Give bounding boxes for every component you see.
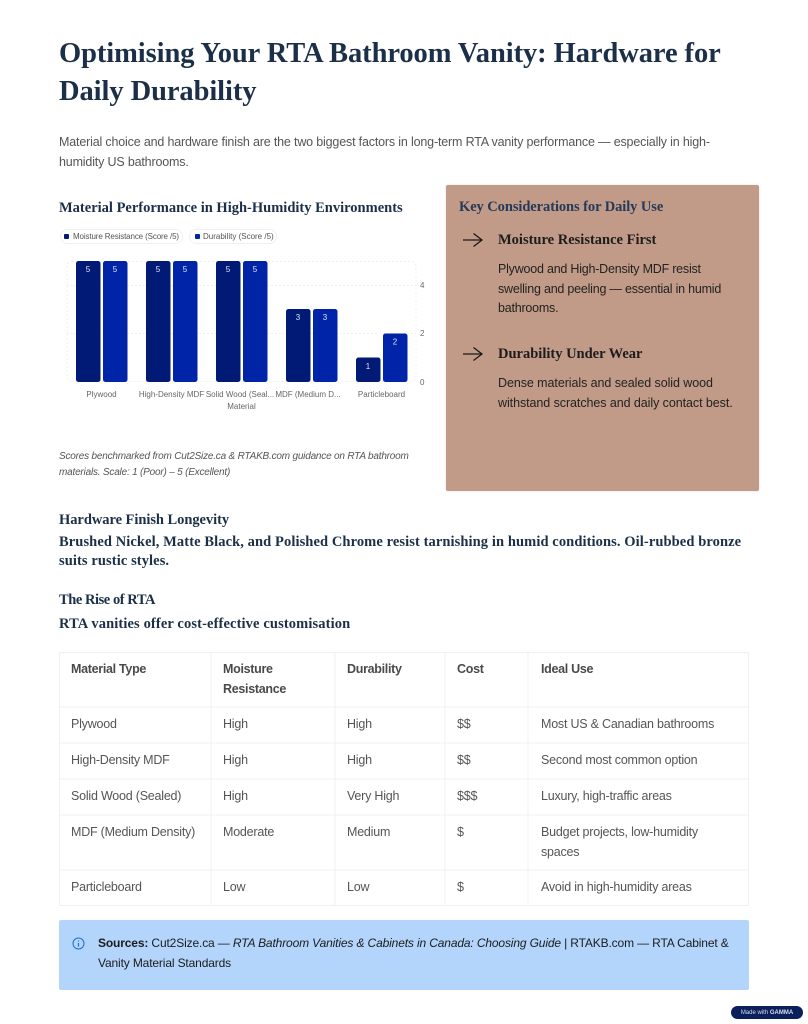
row: solid wood: Very High bbox=[347, 789, 399, 803]
panel heading: Key Considerations for Daily Use bbox=[459, 199, 663, 215]
bar value labels bbox=[86, 265, 398, 371]
callout: sources bbox=[59, 920, 749, 990]
x axis labels: MDF (Medium D... bbox=[275, 390, 341, 399]
row: high-density MDF: High bbox=[347, 753, 372, 767]
bar value labels: 3 bbox=[296, 313, 301, 322]
item text: Dense materials and sealed solid wood bbox=[498, 376, 713, 390]
row: MDF medium density: MDF (Medium Density) bbox=[71, 825, 195, 839]
intro text: Material choice and hardware finish are the two biggest factors in long-term RTA vanity performance — especially in high- bbox=[59, 135, 710, 149]
row: high-density MDF: High-Density MDF bbox=[71, 753, 170, 767]
heading: rise of RTA: The Rise of RTA bbox=[59, 592, 155, 608]
row: solid wood: High bbox=[223, 789, 248, 803]
row: high-density MDF: Second most common option bbox=[541, 753, 697, 767]
row: particleboard: Low bbox=[347, 880, 369, 894]
panel: key considerations bbox=[446, 185, 759, 491]
row: MDF medium density: Budget projects, low-humidity bbox=[541, 825, 698, 839]
item heading: Durability Under Wear bbox=[498, 346, 642, 362]
hardware finish text: suits rustic styles. bbox=[59, 553, 169, 569]
heading: hardware finish: Hardware Finish Longevity bbox=[59, 512, 229, 528]
title: Optimising Your RTA Bathroom Vanity: Hardware for bbox=[59, 38, 721, 69]
row: particleboard: Particleboard bbox=[71, 880, 142, 894]
y axis labels: 0 bbox=[420, 378, 425, 387]
x axis labels: Particleboard bbox=[358, 390, 405, 399]
row: particleboard: Avoid in high-humidity areas bbox=[541, 880, 692, 894]
row: particleboard bbox=[71, 880, 692, 894]
row: particleboard: $ bbox=[457, 880, 464, 894]
item text: withstand scratches and daily contact best. bbox=[498, 396, 733, 410]
row: solid wood: Solid Wood (Sealed) bbox=[71, 789, 181, 803]
item text bbox=[498, 376, 733, 410]
bar value labels: 3 bbox=[323, 313, 328, 322]
row: solid wood bbox=[71, 789, 672, 803]
title bbox=[59, 38, 721, 107]
item text: swelling and peeling — essential in humid bbox=[498, 282, 721, 296]
item text: Plywood and High-Density MDF resist bbox=[498, 262, 701, 276]
badge: made with gamma bbox=[731, 1006, 803, 1019]
legend: durability: Durability (Score /5) bbox=[203, 232, 274, 241]
row: plywood bbox=[71, 717, 714, 731]
icon: arrow bbox=[463, 347, 483, 361]
icon: arrow bbox=[463, 233, 483, 247]
header row bbox=[71, 662, 593, 696]
chart footnote bbox=[59, 451, 409, 478]
row: high-density MDF bbox=[71, 753, 697, 767]
header row: Moisture bbox=[223, 662, 273, 676]
chart footnote: Scores benchmarked from Cut2Size.ca & RTAKB.com guidance on RTA bathroom bbox=[59, 451, 409, 462]
chart heading: Material Performance in High-Humidity Environments bbox=[59, 200, 403, 216]
row: plywood: High bbox=[223, 717, 248, 731]
x axis labels: Material bbox=[227, 402, 256, 411]
intro text: humidity US bathrooms. bbox=[59, 155, 189, 169]
bar value labels: 1 bbox=[366, 362, 371, 371]
legend: moisture resistance: Moisture Resistance (Score /5) bbox=[73, 232, 179, 241]
row: MDF medium density: Medium bbox=[347, 825, 390, 839]
bar chart bbox=[66, 261, 425, 411]
hardware finish text bbox=[59, 534, 741, 569]
row: high-density MDF: $$ bbox=[457, 753, 470, 767]
header row: Cost bbox=[457, 662, 484, 676]
x axis labels: High-Density MDF bbox=[139, 390, 204, 399]
badge: made with gamma: Made with GAMMA bbox=[741, 1010, 793, 1016]
y axis labels: 4 bbox=[420, 281, 425, 290]
bar value labels: 5 bbox=[183, 265, 188, 274]
item text bbox=[498, 262, 721, 315]
header row: Ideal Use bbox=[541, 662, 593, 676]
bar value labels: 5 bbox=[86, 265, 91, 274]
bar value labels: 5 bbox=[253, 265, 258, 274]
header row: Durability bbox=[347, 662, 402, 676]
title: Daily Durability bbox=[59, 76, 256, 107]
bars bbox=[76, 261, 408, 382]
bar value labels: 5 bbox=[156, 265, 161, 274]
sources text: Vanity Material Standards bbox=[98, 956, 231, 970]
row: solid wood: Luxury, high-traffic areas bbox=[541, 789, 672, 803]
hardware finish text: Brushed Nickel, Matte Black, and Polished Chrome resist tarnishing in humid conditions. Oil-rubbed bronze bbox=[59, 534, 741, 550]
intro text bbox=[59, 135, 710, 169]
row: plywood: Most US & Canadian bathrooms bbox=[541, 717, 714, 731]
icon: info bbox=[72, 938, 84, 950]
row: solid wood: $$$ bbox=[457, 789, 477, 803]
legend: moisture resistance bbox=[60, 229, 183, 244]
y axis labels bbox=[420, 281, 425, 387]
x axis labels: Solid Wood (Seal... bbox=[206, 390, 274, 399]
table bbox=[59, 652, 749, 906]
header row: Resistance bbox=[223, 682, 286, 696]
row: particleboard: Low bbox=[223, 880, 245, 894]
row: high-density MDF: High bbox=[223, 753, 248, 767]
row: MDF medium density bbox=[71, 825, 698, 859]
legend: durability bbox=[189, 229, 277, 244]
chart footnote: materials. Scale: 1 (Poor) – 5 (Excellent) bbox=[59, 467, 230, 478]
item heading: Moisture Resistance First bbox=[498, 232, 656, 248]
x axis labels: Plywood bbox=[86, 390, 117, 399]
row: plywood: $$ bbox=[457, 717, 470, 731]
row: MDF medium density: $ bbox=[457, 825, 464, 839]
header row: Material Type bbox=[71, 662, 146, 676]
sources text bbox=[98, 936, 729, 970]
bar value labels: 2 bbox=[393, 338, 398, 346]
bar value labels: 5 bbox=[226, 265, 231, 274]
row: plywood: High bbox=[347, 717, 372, 731]
sources text: Sources: Cut2Size.ca — RTA Bathroom Vanities & Cabinets in Canada: Choosing Guide | RTAKB.com — RTA Cabinet & bbox=[98, 936, 729, 950]
item text: bathrooms. bbox=[498, 301, 558, 315]
y axis labels: 2 bbox=[420, 329, 425, 338]
x axis labels bbox=[86, 390, 405, 411]
bar value labels: 5 bbox=[113, 265, 118, 274]
row: plywood: Plywood bbox=[71, 717, 117, 731]
RTA text: RTA vanities offer cost-effective customisation bbox=[59, 616, 350, 632]
row: MDF medium density: Moderate bbox=[223, 825, 274, 839]
chart legend bbox=[60, 229, 277, 244]
row: MDF medium density: spaces bbox=[541, 845, 579, 859]
